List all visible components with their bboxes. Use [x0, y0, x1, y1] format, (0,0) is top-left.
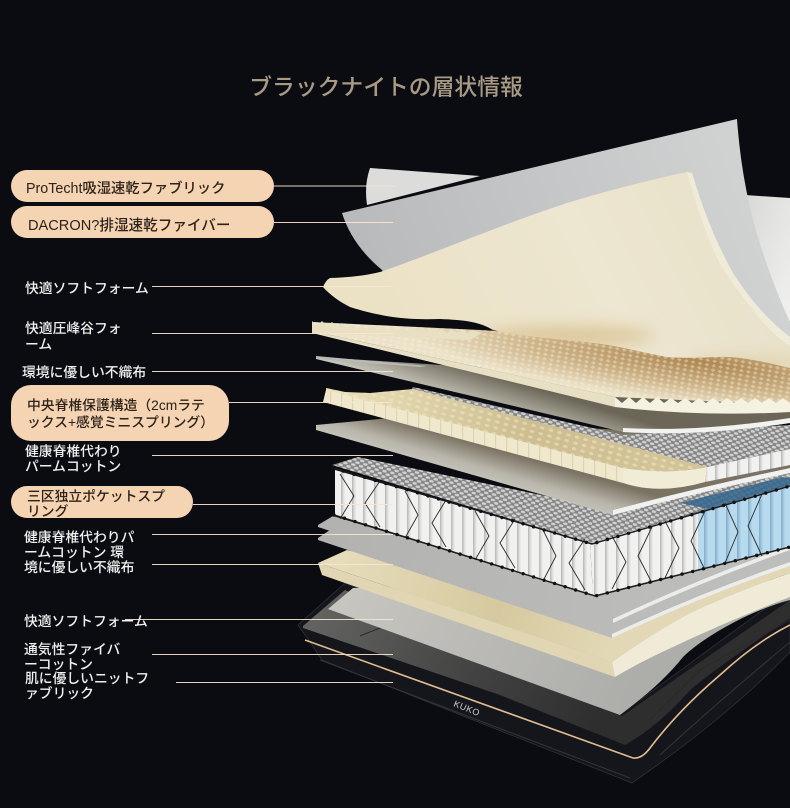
label: nonwoven: 環境に優しい不織布	[22, 364, 146, 380]
layer: gray sheet A	[318, 516, 790, 623]
layer: palm cotton sheet	[316, 417, 790, 515]
label: palm cotton and nonwoven	[24, 529, 135, 575]
label: breathable fiber cotton: ーコットン	[24, 657, 93, 672]
layer: DACRON fiber gray sheet	[342, 119, 790, 340]
layer: bottom gray sheet	[328, 580, 790, 715]
label pill: ProTecht: ProTecht吸湿速乾ファブリック	[26, 179, 225, 197]
layer: nonwoven sheet	[316, 356, 790, 433]
layer: gray sheet B	[318, 530, 790, 638]
layer: upper cream foam	[323, 172, 790, 370]
label: breathable fiber cotton	[24, 642, 121, 672]
label: soft foam lower: 快適ソフトフォーム	[24, 613, 148, 629]
mattress exploded layers	[298, 119, 790, 783]
label pill: ProTecht	[11, 170, 274, 202]
brand mark: KUKO	[452, 699, 482, 718]
layer: pocket springs	[332, 457, 790, 596]
label: soft foam: 快適ソフトフォーム	[25, 280, 149, 296]
layer: base black knit	[298, 583, 790, 783]
label: pressure foam: ーム	[25, 337, 52, 352]
label: palm cotton and nonwoven: ームコットン 環	[24, 545, 124, 560]
title: ブラックナイトの層状情報	[249, 74, 523, 100]
label: pressure foam: 快適圧峰谷フォ	[25, 320, 122, 336]
label: pressure foam	[25, 320, 122, 352]
label: palm cotton and nonwoven: 健康脊椎代わりパ	[24, 529, 135, 545]
label: knit fabric: 肌に優しいニットフ	[25, 671, 149, 686]
label: palm cotton: パームコットン	[25, 459, 121, 474]
label pill: pocket springs: リング	[27, 503, 69, 519]
label pill: pocket springs	[11, 486, 193, 519]
layer: lower cream foam	[318, 540, 790, 677]
layer: ProTecht top fabric, back pieces	[366, 168, 790, 322]
label: knit fabric	[25, 671, 149, 701]
label: palm cotton	[25, 443, 122, 474]
leader lines	[125, 186, 396, 682]
label pill: spine protection: ックス+感覚ミニスプリング）	[27, 414, 214, 430]
layer: egg crate foam	[312, 321, 790, 414]
label: palm cotton: 健康脊椎代わり	[25, 443, 122, 459]
label pill: DACRON: DACRON?排湿速乾ファイバー	[28, 217, 230, 234]
label pill: spine protection	[11, 385, 229, 441]
label pill: pocket springs: 三区独立ポケットスプ	[27, 489, 165, 504]
label: breathable fiber cotton: 通気性ファイバ	[24, 642, 121, 657]
layer: central latex and mini springs	[323, 387, 790, 489]
label pill: DACRON	[11, 206, 274, 238]
label pill: spine protection: 中央脊椎保護構造（2cmラテ	[27, 397, 205, 413]
label: knit fabric: ァブリック	[25, 685, 94, 701]
label: palm cotton and nonwoven: 境に優しい不織布	[24, 559, 135, 575]
